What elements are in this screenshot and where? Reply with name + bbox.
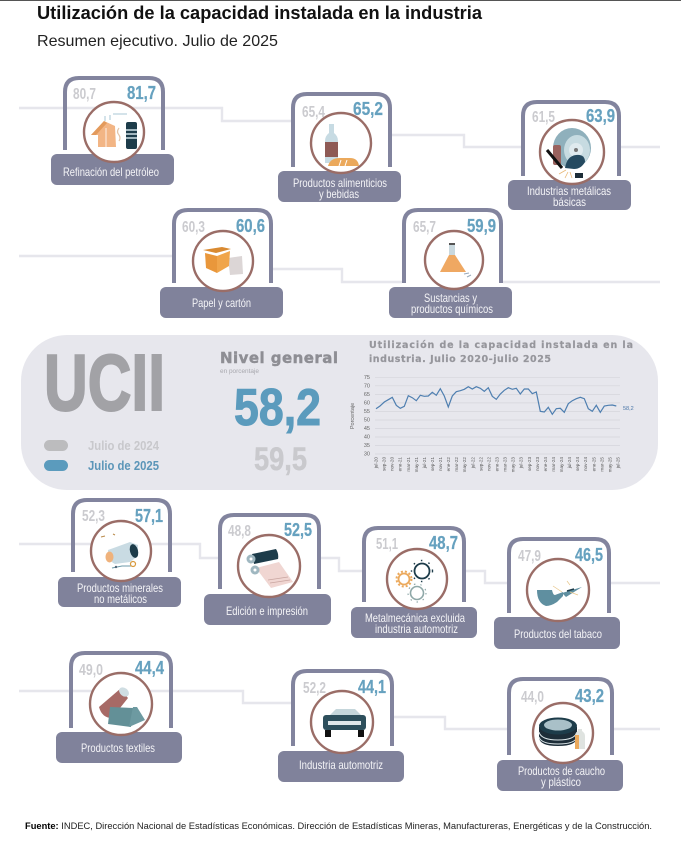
icon: metal disc and welder: [547, 128, 591, 178]
card: Papel y cartón: 60,3: [182, 219, 205, 236]
card: Productos alimenticios y bebidas: 65,2: [353, 98, 383, 119]
card: Sustancias y productos químicos: [389, 210, 512, 318]
card: Industria automotriz: Industria automotriz: [299, 758, 383, 772]
UCII heading: UCII: [44, 338, 165, 427]
card: Productos de caucho y plástico: [497, 679, 623, 791]
card: Papel y cartón: [160, 210, 283, 318]
line chart: sep-22: [478, 457, 483, 471]
card: Metalmecánica excluida industria automotriz: 48,7: [429, 532, 458, 553]
card: Edición e impresión: [204, 515, 331, 625]
card: Edición e impresión: 48,8: [228, 523, 251, 540]
card: Productos del tabaco: [494, 539, 620, 649]
line chart: 65: [364, 392, 370, 398]
card: Productos textiles: Productos textiles: [81, 741, 155, 755]
card: Industrias metálicas básicas: 61,5: [532, 109, 555, 126]
line chart: jul-25: [616, 457, 620, 469]
card: Productos minerales no metálicos: Productos minerales: [77, 581, 163, 595]
source note: Fuente: INDEC, Dirección Nacional de Estadísticas Económicas. Dirección de Estadísticas Mineras, Manufactureras, Energéticas y de la Construcción.: [25, 821, 652, 831]
line chart: may-23: [511, 457, 516, 472]
card: Industrias metálicas básicas: 63,9: [586, 105, 615, 126]
line chart: Porcentaje: [350, 403, 356, 429]
line chart: may-25: [607, 457, 612, 472]
line chart: nov-20: [390, 457, 395, 471]
line chart: mar-22: [454, 457, 459, 472]
line chart: mar-25: [599, 457, 604, 472]
card: Productos del tabaco: 47,9: [518, 548, 541, 565]
line chart: 58,2: [623, 406, 634, 412]
line chart: sep-24: [575, 457, 580, 471]
line chart: mar-23: [503, 457, 508, 472]
card: Edición e impresión: 52,5: [284, 519, 312, 540]
card: Refinación del petróleo: 81,7: [127, 82, 156, 103]
value 2024: 59,5: [254, 441, 307, 477]
line chart: may-21: [414, 457, 419, 472]
line chart: ene-21: [398, 457, 403, 471]
line chart: mar-24: [551, 457, 556, 472]
line chart: jul-21: [422, 457, 427, 469]
card: Industria automotriz: 52,2: [303, 680, 326, 697]
card: Productos de caucho y plástico: Productos de caucho: [518, 764, 605, 778]
card: Refinación del petróleo: [51, 78, 174, 185]
card: Industrias metálicas básicas: básicas: [553, 195, 586, 209]
chart title: [369, 340, 633, 365]
card: Metalmecánica excluida industria automotriz: [351, 528, 477, 638]
line chart: jul-24: [567, 457, 572, 469]
legend: [44, 439, 159, 473]
line chart: 60: [364, 401, 370, 407]
panel: UCII summary: [21, 335, 658, 490]
line chart: may-22: [462, 457, 467, 472]
card: Metalmecánica excluida industria automotriz: industria automotriz: [375, 622, 458, 636]
card: Industrias metálicas básicas: Industrias metálicas: [527, 184, 611, 198]
line chart: nov-24: [583, 457, 588, 471]
card: Papel y cartón: Papel y cartón: [192, 296, 251, 310]
card: Productos alimenticios y bebidas: [278, 94, 401, 202]
panel: UCII summary: en porcentaje: [220, 368, 259, 375]
legend: Julio de 2024: [88, 439, 159, 453]
icon: cardboard box: [203, 247, 243, 275]
card: Refinación del petróleo: 80,7: [73, 86, 96, 103]
card: Productos del tabaco: 46,5: [575, 544, 603, 565]
line chart: ene-24: [543, 457, 548, 471]
card: Sustancias y productos químicos: 59,9: [467, 215, 496, 236]
card: Industrias metálicas básicas: [508, 102, 631, 210]
icon: cement mixer: [101, 534, 140, 568]
icon: printing rollers: [246, 549, 293, 588]
legend: Julio de 2025: [88, 459, 159, 473]
line chart: jul-20: [374, 457, 378, 469]
line chart: may-24: [559, 457, 564, 472]
card: Productos minerales no metálicos: [58, 500, 181, 607]
icon: flask: [440, 243, 471, 277]
line chart: 75: [364, 375, 370, 381]
general level heading: Nivel general: [220, 349, 338, 367]
line chart: sep-20: [382, 457, 387, 471]
line chart: nov-22: [486, 457, 491, 471]
line chart: 45: [364, 426, 370, 432]
icon: car: [323, 709, 366, 737]
card: Productos de caucho y plástico: y plástico: [541, 775, 581, 789]
line chart: 35: [364, 443, 370, 449]
card: Productos minerales no metálicos: 57,1: [135, 505, 163, 526]
card: Productos de caucho y plástico: 43,2: [575, 685, 604, 706]
card: Productos alimenticios y bebidas: Productos alimenticios: [293, 176, 387, 190]
chart title: industria. Julio 2020-julio 2025: [369, 354, 551, 365]
card: Sustancias y productos químicos: 65,7: [413, 219, 436, 236]
card: Industria automotriz: [278, 671, 404, 782]
line chart: sep-23: [527, 457, 532, 471]
card: Refinación del petróleo: Refinación del petróleo: [63, 165, 159, 179]
card: Papel y cartón: 60,6: [236, 215, 265, 236]
card: Productos de caucho y plástico: 44,0: [521, 689, 544, 706]
line chart: ene-23: [494, 457, 500, 471]
card: Sustancias y productos químicos: productos químicos: [411, 302, 493, 316]
icon: gears: [396, 560, 432, 602]
card: Productos del tabaco: Productos del tabaco: [514, 627, 602, 641]
subtitle: Resumen ejecutivo. Julio de 2025: [37, 33, 278, 50]
line chart: ene-25: [591, 457, 596, 471]
line chart: nov-21: [438, 457, 443, 471]
chart title: Utilización de la capacidad instalada en la: [369, 340, 633, 351]
icon: pipe: [537, 581, 582, 606]
icon: thread and fabric: [99, 685, 145, 727]
line chart: mar-21: [406, 457, 411, 472]
title: Utilización de la capacidad instalada en la industria: [37, 2, 483, 23]
line chart: jul-22: [470, 457, 475, 469]
icon: tires and bottle: [539, 718, 585, 749]
icon: refinery: [91, 114, 137, 149]
card: Metalmecánica excluida industria automotriz: Metalmecánica excluida: [365, 611, 465, 625]
card: Productos textiles: 49,0: [79, 662, 103, 679]
card: Productos textiles: [56, 653, 182, 763]
card: Productos textiles: 44,4: [135, 657, 165, 678]
card: Productos alimenticios y bebidas: 65,4: [302, 104, 325, 121]
card: Productos alimenticios y bebidas: y bebidas: [319, 187, 359, 201]
value 2025: 58,2: [234, 379, 321, 437]
card: Productos minerales no metálicos: no metálicos: [94, 592, 147, 606]
line chart: ene-22: [446, 457, 451, 471]
card: Metalmecánica excluida industria automotriz: 51,1: [376, 536, 398, 553]
icon: bottle and bread: [325, 124, 359, 166]
line chart: 55: [364, 409, 370, 415]
line chart: 40: [364, 435, 370, 441]
line chart: [350, 375, 634, 472]
line chart: nov-23: [535, 457, 540, 471]
line chart: jul-23: [519, 457, 524, 469]
line chart: 70: [364, 384, 370, 390]
line chart: sep-21: [430, 457, 435, 471]
line chart: 50: [364, 418, 370, 424]
line chart: 30: [364, 452, 370, 458]
card: Sustancias y productos químicos: Sustancias y: [424, 291, 477, 305]
card: Edición e impresión: Edición e impresión: [226, 604, 308, 618]
card: Productos minerales no metálicos: 52,3: [82, 508, 105, 525]
card: Industria automotriz: 44,1: [358, 676, 386, 697]
